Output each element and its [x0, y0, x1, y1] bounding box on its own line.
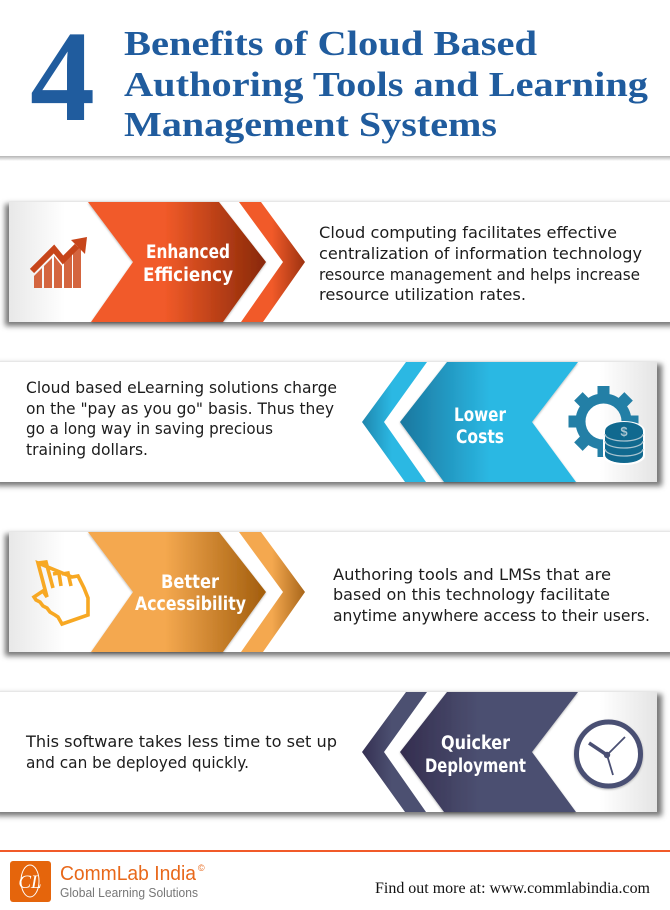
logo mark: [10, 861, 51, 902]
text block: resource utilization rates.: [319, 285, 526, 304]
logo wordmark: [60, 863, 205, 900]
text block: Cloud computing facilitates effective: [319, 223, 617, 242]
text block: centralization of information technology: [319, 244, 642, 263]
label: Better: [161, 572, 220, 593]
label: Efficiency: [143, 265, 233, 286]
label: Accessibility: [135, 594, 246, 615]
label: [143, 242, 233, 286]
text block: [25, 732, 337, 772]
text block: [319, 223, 642, 304]
label: [425, 733, 526, 777]
label: Deployment: [425, 756, 526, 777]
panel: enhanced efficiency: [5, 202, 670, 326]
label: Lower: [454, 405, 507, 426]
title: Management Systems: [124, 105, 497, 144]
logo wordmark: CommLab India: [60, 863, 197, 885]
text block: resource management and helps increase: [319, 265, 640, 284]
text block: This software takes less time to set up: [25, 732, 337, 751]
text block: based on this technology facilitate: [333, 585, 610, 604]
panel: better accessibility: [5, 532, 670, 656]
text block: Cloud based eLearning solutions charge: [26, 378, 337, 397]
text block: training dollars.: [26, 440, 148, 459]
text block: [26, 378, 337, 459]
label: Quicker: [441, 733, 511, 754]
title: Benefits of Cloud Based: [124, 24, 538, 63]
panel: lower costs: [0, 362, 662, 486]
footer: [0, 850, 670, 902]
website link text: Find out more at: www.commlabindia.com: [375, 880, 650, 897]
text block: go a long way in saving precious: [26, 419, 273, 438]
logo mark: CL: [18, 872, 42, 893]
icon: clock: [576, 722, 640, 786]
label: [454, 405, 507, 448]
icon: rising chart: [32, 237, 87, 288]
text block: [333, 565, 650, 625]
panel: quicker deployment: [0, 692, 662, 816]
logo wordmark: Global Learning Solutions: [60, 885, 198, 900]
label: Costs: [456, 427, 504, 448]
icon: hand cursor: [34, 562, 88, 624]
logo wordmark: ©: [198, 863, 205, 873]
label: Enhanced: [146, 242, 230, 263]
header band: [0, 5, 670, 161]
big numeral 4: 4: [30, 5, 95, 149]
icon: gear and coins: $: [620, 424, 628, 439]
text block: Authoring tools and LMSs that are: [333, 565, 611, 584]
text block: anytime anywhere access to their users.: [333, 606, 650, 625]
title: [124, 24, 649, 144]
text block: and can be deployed quickly.: [26, 753, 249, 772]
label: [135, 572, 246, 615]
icon: gear and coins: [568, 386, 645, 465]
title: Authoring Tools and Learning: [124, 65, 649, 104]
text block: on the "pay as you go" basis. Thus they: [26, 399, 334, 418]
